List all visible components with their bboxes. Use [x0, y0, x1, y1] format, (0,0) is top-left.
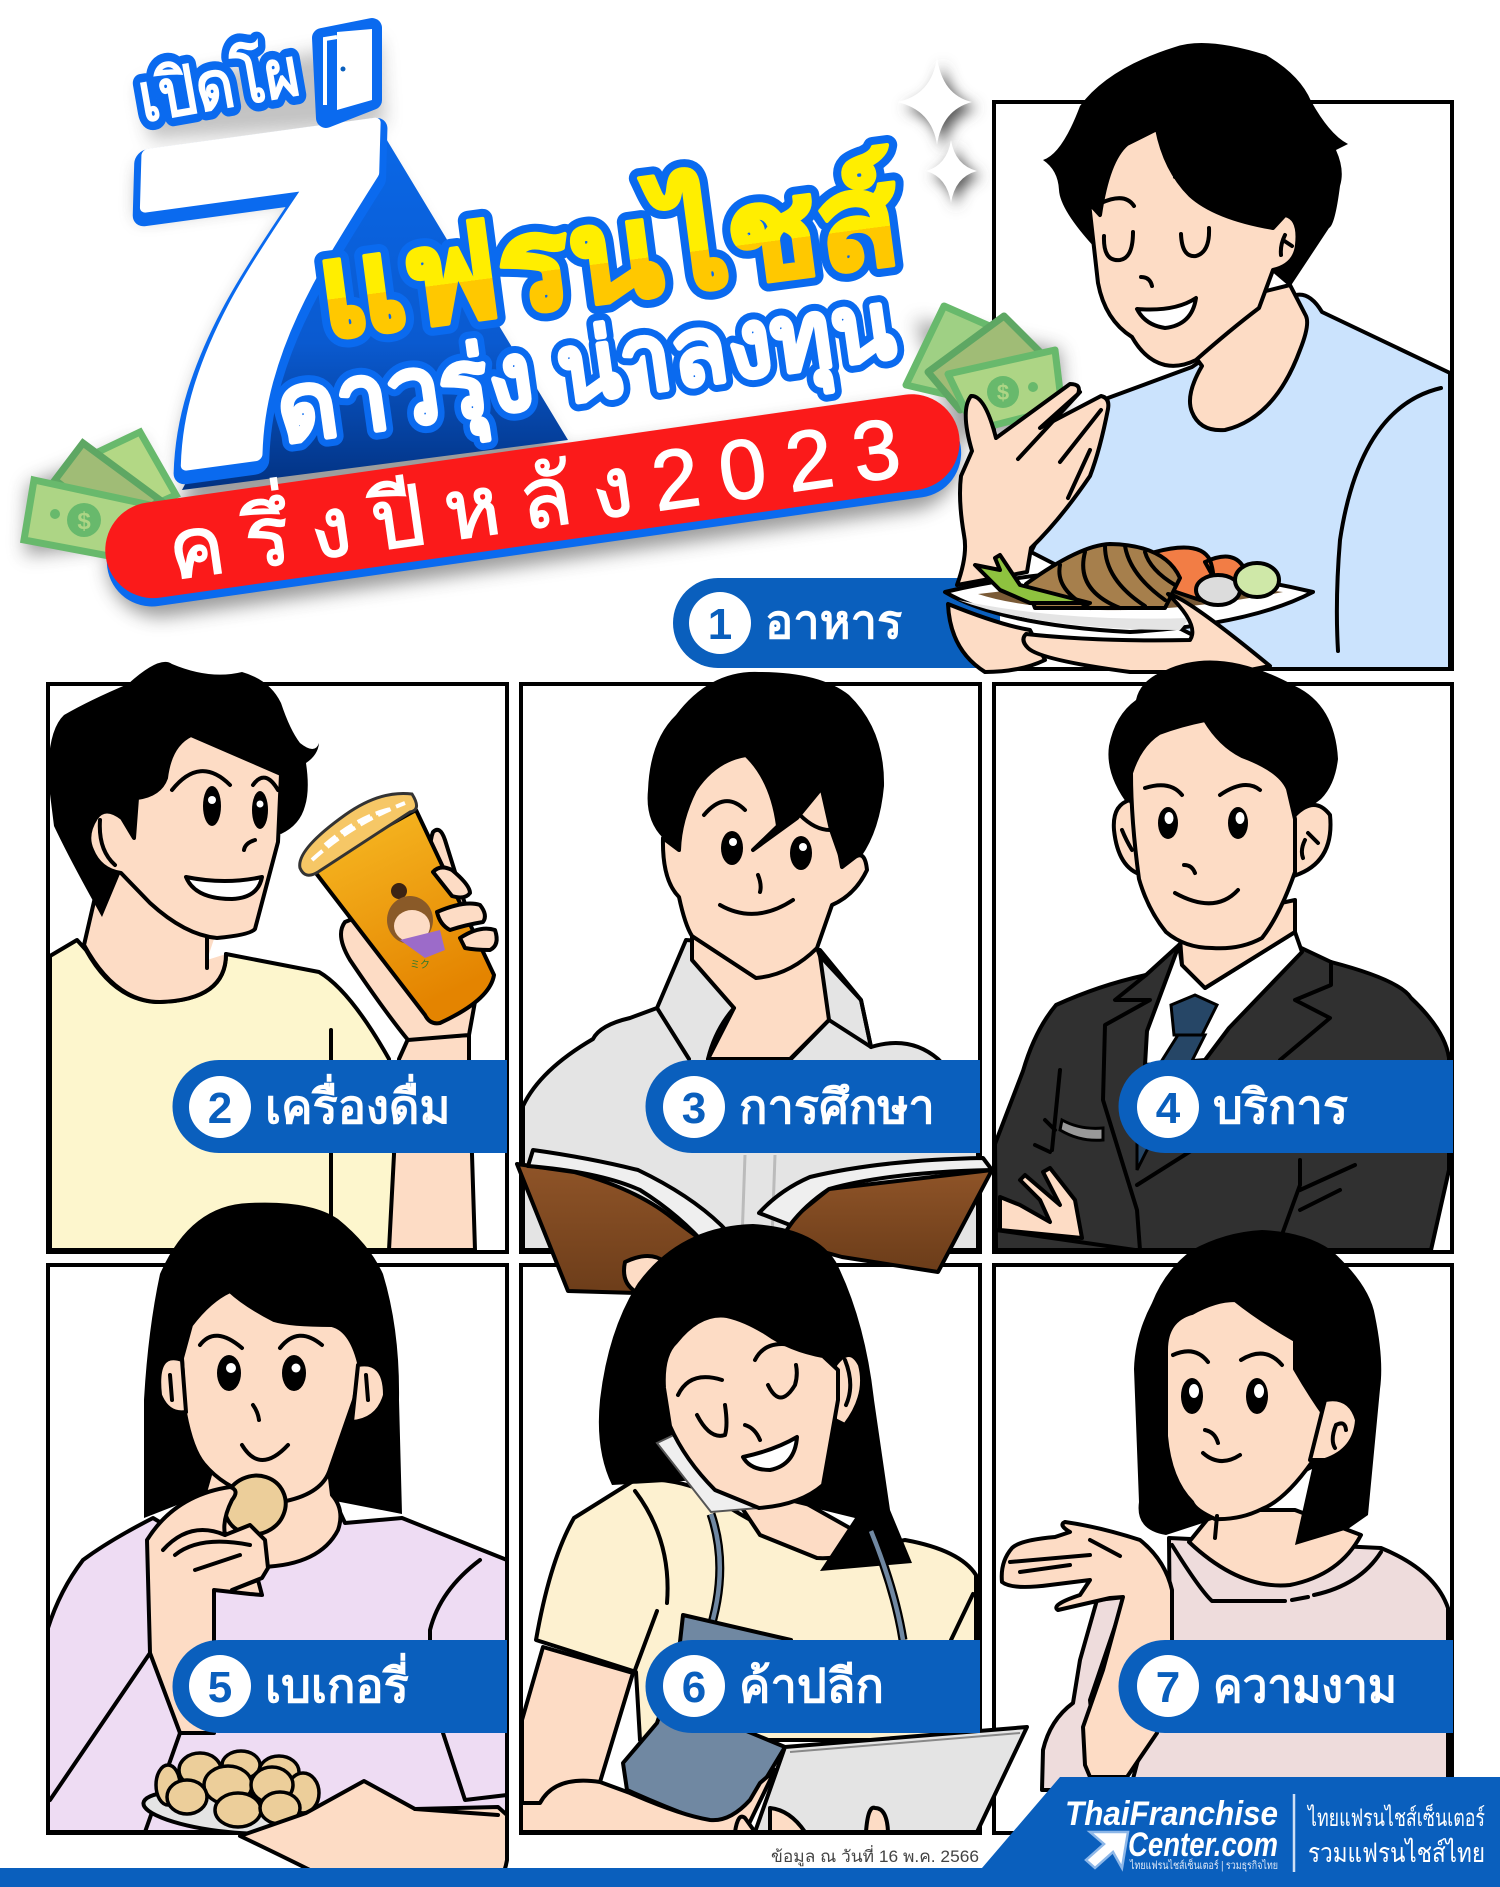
fingers [433, 867, 470, 897]
person 1: man with plate of food [945, 43, 1450, 672]
cup logo [387, 883, 445, 971]
noodles [1026, 544, 1180, 608]
label 7: beauty: ความงาม [1213, 1659, 1397, 1712]
ears [159, 1358, 385, 1422]
supporting arm [948, 604, 1045, 672]
bag straps [708, 1514, 903, 1640]
label 1: food: 1 [708, 600, 732, 649]
lower hand [240, 1781, 507, 1880]
right pages [759, 1158, 992, 1225]
headline: rising stars worth investing: ดาวรุ่ง น่าลงทุน [270, 271, 902, 470]
person 4: man in suit [995, 661, 1449, 1250]
source note: ข้อมูล ณ วันที่ 16 พ.ค. 2566 [771, 1845, 979, 1867]
shirt [1031, 295, 1450, 669]
label 4: services [1118, 1060, 1453, 1153]
upper arm [522, 1647, 633, 1832]
label 2: beverage [172, 1060, 507, 1153]
person 5: woman eating bakery [48, 1203, 507, 1880]
pocket [1060, 1120, 1103, 1140]
money right: $ [997, 380, 1009, 405]
bakery ball [215, 1466, 295, 1544]
neck [730, 1490, 880, 1558]
shirt fold lines [635, 1491, 973, 1670]
label 2: beverage: 2 [208, 1084, 232, 1133]
hair [599, 1224, 912, 1571]
crossed hand [1000, 1168, 1082, 1238]
cup foam lid [300, 793, 417, 875]
hand behind book [624, 1256, 665, 1294]
hair [48, 662, 319, 917]
plate [945, 570, 1313, 632]
left wing cover [517, 1164, 735, 1300]
open book [517, 1150, 992, 1300]
eyes [1181, 1378, 1203, 1414]
neck [86, 870, 226, 1002]
headline: open list: เปิดโผ [132, 32, 305, 137]
title drop shadow: 7 [107, 34, 390, 584]
shirt [523, 940, 978, 1250]
phone [657, 1434, 759, 1512]
sleeve [1042, 1597, 1125, 1790]
title block [24, 22, 1065, 624]
logo: Center.com [1128, 1826, 1278, 1864]
tie [1137, 995, 1217, 1170]
hair [1134, 1230, 1381, 1545]
label 5: bakery: เบเกอรี่ [265, 1652, 409, 1712]
eyes [1158, 807, 1178, 839]
lapels and folds [1103, 962, 1355, 1250]
face [1131, 720, 1295, 948]
cup logo: ミク [410, 959, 430, 971]
mouth [186, 877, 262, 899]
face [664, 1316, 838, 1508]
right wing cover [780, 1170, 992, 1272]
headline: rising stars worth investing: ดาวรุ่ง น่าลงทุน [270, 271, 902, 470]
label 4: services: บริการ [1213, 1080, 1348, 1133]
hair [144, 1203, 402, 1518]
red pill subtitle: ครึ่งปีหลัง2023 [160, 390, 906, 598]
apron bag [623, 1615, 791, 1823]
hair [1108, 661, 1338, 819]
plate of bakery [141, 1751, 319, 1841]
headline: franchise: แฟรนไชส์ [308, 142, 908, 366]
face [1089, 129, 1298, 366]
title drop shadow [25, 34, 1065, 624]
herbs [975, 555, 1090, 603]
hand and arm [147, 1487, 268, 1733]
neck [1179, 900, 1295, 988]
lime [1235, 563, 1279, 597]
shirt [1130, 1538, 1448, 1790]
neck [1189, 1510, 1361, 1585]
eyes [217, 1355, 241, 1391]
icon: arrow [1086, 1832, 1128, 1868]
holding fingers [1023, 594, 1270, 672]
person 7: woman presenting [1002, 1230, 1448, 1790]
face [182, 1291, 360, 1502]
label 2: beverage: เครื่องดื่ม [265, 1073, 450, 1133]
eyes [203, 786, 221, 826]
face [89, 735, 281, 938]
hair [648, 672, 884, 867]
blue triangle [182, 122, 568, 490]
shirt [48, 1495, 507, 1832]
label 4: services: 4 [1156, 1084, 1181, 1133]
money right [906, 306, 1062, 430]
left pages [528, 1150, 735, 1250]
collar [1172, 1545, 1381, 1601]
shirt [536, 1478, 976, 1740]
tablet [735, 1727, 1027, 1832]
neck [692, 936, 829, 1059]
arm [389, 1035, 475, 1250]
person 6: woman on phone [521, 1224, 976, 1832]
face [1166, 1300, 1325, 1519]
label 3: education [646, 1060, 980, 1153]
arm and hand [1002, 1522, 1172, 1777]
shirt [50, 940, 399, 1250]
mouth [1137, 298, 1196, 328]
label 6: retail: ค้าปลีก [739, 1659, 884, 1712]
money left: $ [77, 508, 91, 535]
label 3: education: 3 [682, 1084, 706, 1133]
label 7: beauty [1118, 1640, 1453, 1733]
footer banner [0, 1777, 1500, 1887]
ear [1310, 1399, 1357, 1460]
label 7: beauty: 7 [1156, 1663, 1180, 1712]
label 6: retail [646, 1640, 980, 1733]
big number 7: 7 [115, 29, 398, 579]
label 5: bakery: 5 [208, 1663, 232, 1712]
headline: franchise: แฟรนไชส์ [308, 142, 908, 366]
money left [24, 432, 176, 560]
neck [200, 1440, 340, 1567]
person 2: man with iced tea [48, 662, 497, 1250]
person 3: man reading a book [517, 672, 992, 1300]
lower arm [521, 1770, 775, 1832]
raised hand [957, 384, 1108, 585]
hand behind cup [341, 830, 478, 1040]
shrimp [1155, 548, 1245, 600]
fingers [735, 1808, 888, 1832]
label 5: bakery [172, 1640, 507, 1733]
mouth [743, 1437, 797, 1470]
hair [1043, 43, 1348, 287]
big number 7: 7 [115, 22, 398, 572]
label 1: food [673, 578, 1000, 668]
ears [1114, 800, 1330, 877]
tagline [1307, 1803, 1485, 1868]
shirt collar [1145, 932, 1302, 1065]
ear [835, 1355, 862, 1425]
icon: door [322, 28, 372, 118]
label 6: retail: 6 [682, 1663, 706, 1712]
food on plate [975, 544, 1279, 608]
label 3: education: การศึกษา [739, 1080, 935, 1133]
sparkle large [897, 57, 978, 151]
logo: ThaiFranchise [1065, 1795, 1278, 1833]
cup [312, 810, 494, 1023]
shrimp ring [1196, 575, 1240, 605]
sparkle small [926, 140, 982, 208]
logo [1065, 1795, 1278, 1872]
neck [1190, 285, 1307, 430]
face [663, 755, 867, 978]
eyes [721, 831, 743, 865]
logo: ไทยแฟรนไชส์เซ็นเตอร์ | รวมธุรกิจไทย [1129, 1858, 1278, 1872]
label 1: food: อาหาร [765, 595, 902, 648]
suit [995, 945, 1449, 1250]
